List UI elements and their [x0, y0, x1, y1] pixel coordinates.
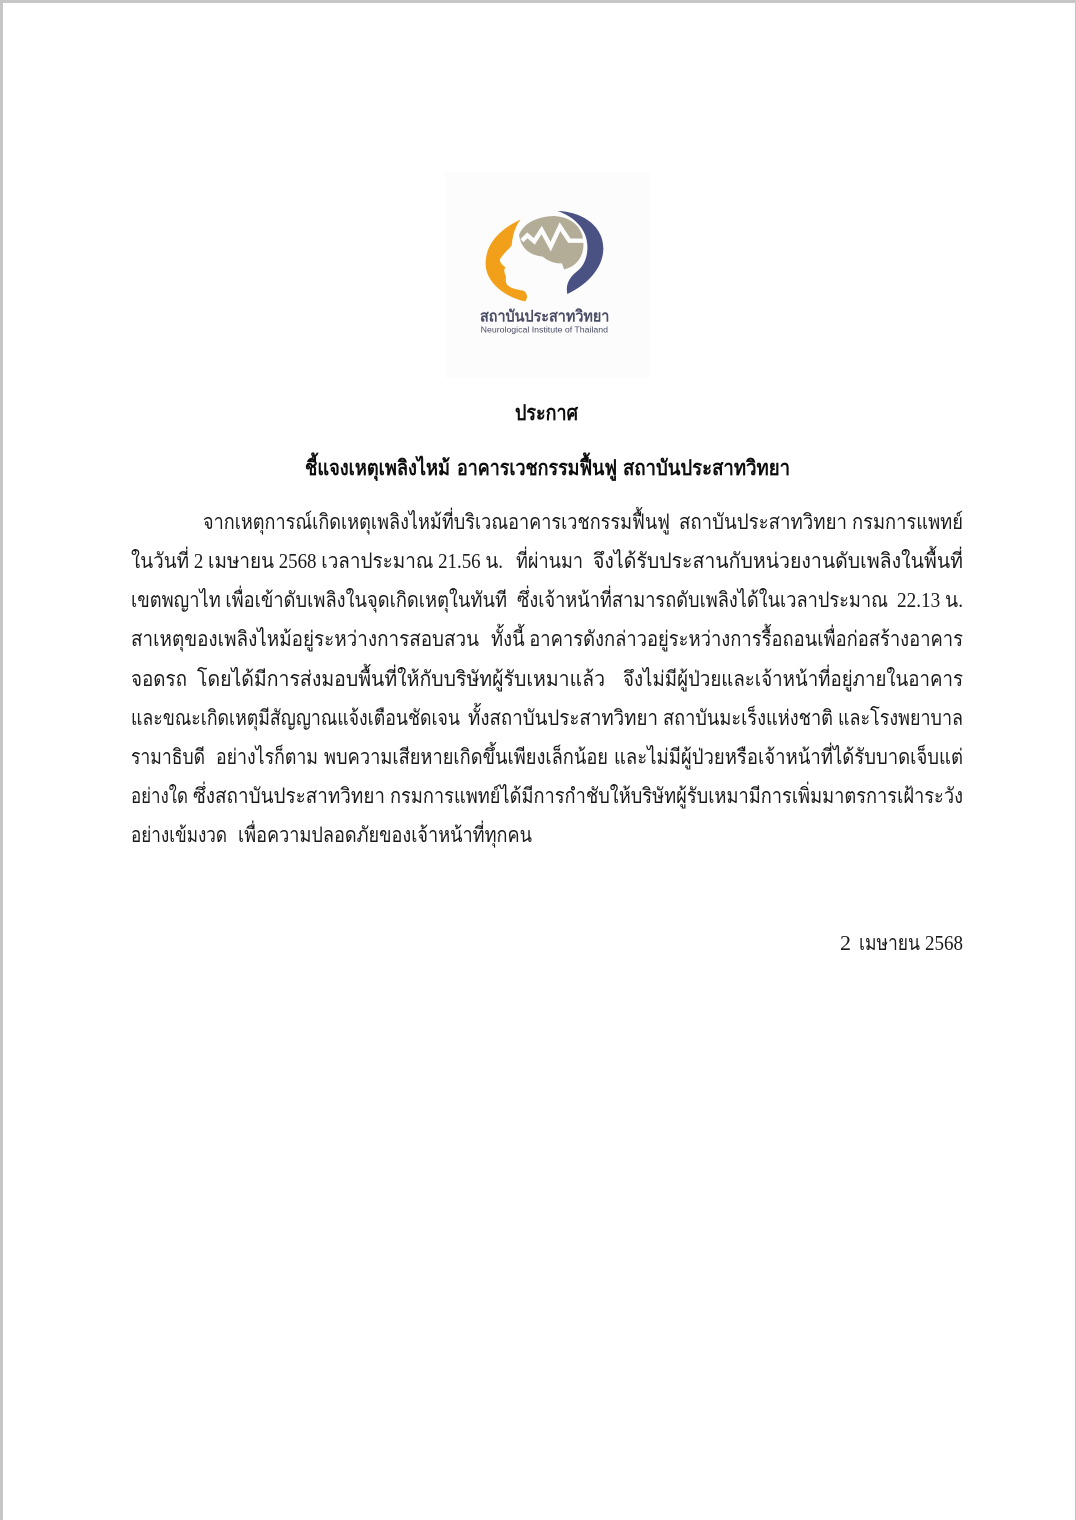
text block: announcement body: [131, 507, 963, 848]
icon: grey brain with pulse line: [519, 216, 584, 269]
text block: announcement body: ในวันที่ 2 เมษายน 2568 เวลาประมาณ 21.56 น.: [131, 546, 503, 573]
text block: announcement body: จึงไม่มีผู้ป่วยและเจ้าหน้าที่อยู่ภายในอาคาร: [623, 664, 963, 692]
logo: Neurological Institute of Thailand: [480, 211, 609, 334]
text block: announcement body: ทั้งนี้ อาคารดังกล่าวอยู่ระหว่างการรื้อถอนเพื่อก่อสร้างอาคาร: [491, 624, 963, 652]
text block: announcement body: 22.13 น.: [897, 588, 963, 612]
text block: announcement body: พบความเสียหายเกิดขึ้นเพียงเล็กน้อย: [324, 742, 608, 769]
text block: announcement body: กรมการแพทย์: [852, 510, 963, 534]
logo text: English name: Neurological Institute of Thailand: [481, 324, 608, 334]
heading: subject: สถาบันประสาทวิทยา: [623, 456, 790, 480]
text block: announcement body: เขตพญาไท เพื่อเข้าดับเพลิงในจุดเกิดเหตุในทันที: [131, 585, 507, 613]
text block: announcement body: อย่างไรก็ตาม: [216, 743, 318, 769]
text block: announcement body: ทั้งสถาบันประสาทวิทยา: [468, 703, 658, 730]
text block: announcement body: โดยได้มีการส่งมอบพื้นที่ให้กับบริษัทผู้รับเหมาแล้ว: [197, 664, 605, 692]
icon: navy arc: [557, 211, 603, 294]
text block: announcement body: และโรงพยาบาล: [838, 706, 963, 730]
text block: announcement body: ซึ่งสถาบันประสาทวิทยา: [193, 781, 385, 808]
heading: subject: [305, 452, 790, 482]
text block: announcement body: จากเหตุการณ์เกิดเหตุเพลิงไหม้ที่บริเวณอาคารเวชกรรมฟื้นฟู: [203, 507, 670, 535]
text block: announcement body: สาเหตุของเพลิงไหม้อยู่ระหว่างการสอบสวน: [131, 627, 479, 652]
text block: announcement body: ซึ่งเจ้าหน้าที่สามารถดับเพลิงได้ในเวลาประมาณ: [517, 585, 888, 612]
date: 2: [840, 931, 851, 955]
text block: announcement body: จึงได้รับประสานกับหน่วยงานดับเพลิงในพื้นที่: [593, 546, 963, 573]
text block: announcement body: สถาบันประสาทวิทยา: [679, 510, 847, 534]
text block: announcement body: อย่างใด: [131, 784, 188, 808]
text block: announcement body: เพื่อความปลอดภัยของเจ้าหน้าที่ทุกคน: [238, 820, 532, 848]
heading: subject: ชี้แจงเหตุเพลิงไหม้: [305, 452, 450, 482]
heading: subject: อาคารเวชกรรมฟื้นฟู: [457, 452, 617, 482]
text block: announcement body: ที่ผ่านมา: [516, 546, 583, 573]
logo text: Thai name: สถาบันประสาทวิทยา: [480, 307, 609, 325]
text block: announcement body: อย่างเข้มงวด: [131, 823, 227, 847]
date: เมษายน: [859, 931, 920, 955]
text block: announcement body: และขณะเกิดเหตุมีสัญญาณแจ้งเตือนชัดเจน: [131, 706, 460, 731]
heading: announcement: ประกาศ: [515, 401, 579, 425]
date: [840, 931, 963, 955]
text block: announcement body: กรมการแพทย์ได้มีการกำชับให้บริษัทผู้รับเหมามีการเพิ่มมาตรการเฝ้าระวัง: [390, 781, 963, 809]
text block: announcement body: รามาธิบดี: [131, 745, 205, 769]
text block: announcement body: สถาบันมะเร็งแห่งชาติ: [663, 704, 833, 730]
date: 2568: [925, 931, 963, 955]
icon: orange face: [486, 219, 527, 301]
text block: announcement body: และไม่มีผู้ป่วยหรือเจ้าหน้าที่ได้รับบาดเจ็บแต่: [614, 742, 963, 770]
text block: announcement body: จอดรถ: [131, 667, 187, 691]
